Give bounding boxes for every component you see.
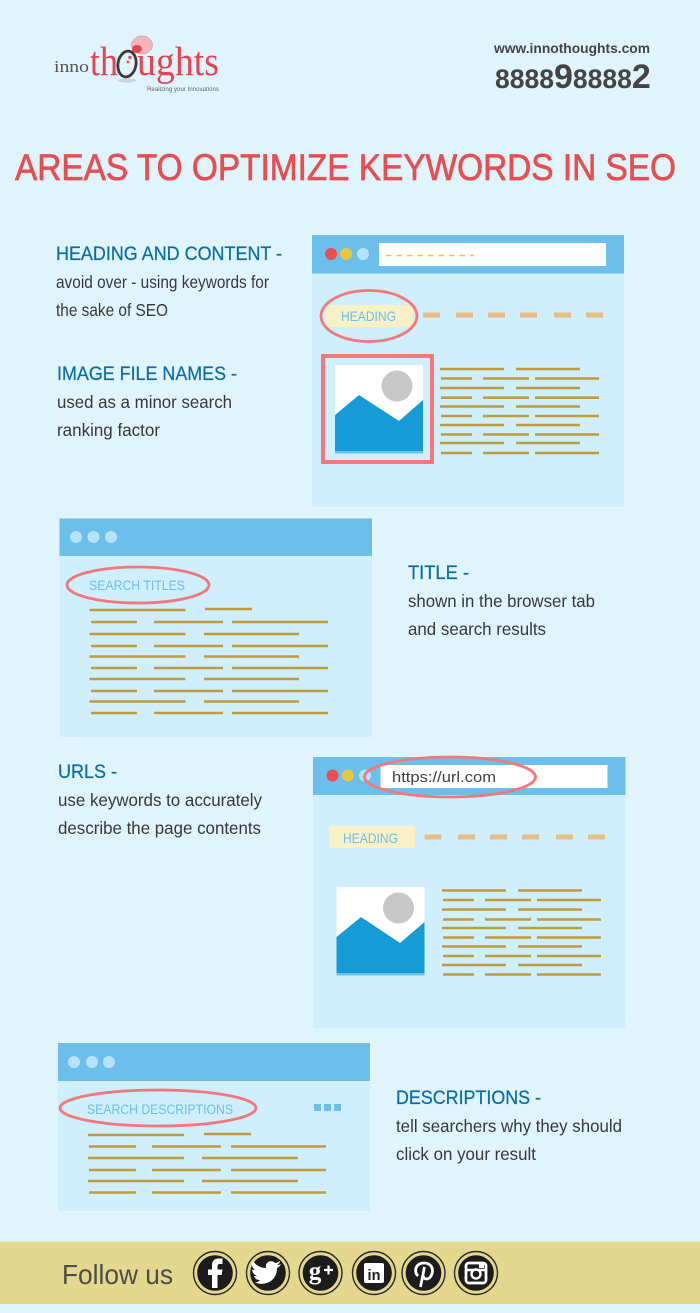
text block: heading and content: the sake of SEO — [56, 300, 168, 320]
panel: browser with search titles highlighted: SEARCH TITLES — [89, 577, 185, 593]
text block: heading and content: HEADING AND CONTENT - — [56, 243, 282, 265]
icon: pinterest — [402, 1252, 445, 1294]
text block: title: TITLE - — [408, 562, 469, 584]
footer bar — [0, 1242, 700, 1304]
icon: linkedin: in — [368, 1268, 380, 1284]
text block: heading and content — [56, 243, 282, 320]
contact details: www.innothoughts.com — [493, 40, 650, 56]
text block: urls: describe the page contents — [58, 818, 261, 838]
icon: twitter — [246, 1252, 290, 1294]
logo — [54, 36, 219, 93]
panel: browser with search descriptions highlighted — [58, 1043, 370, 1211]
text block: descriptions — [396, 1087, 622, 1164]
panel: browser with heading and image highlighted: HEADING — [341, 308, 396, 324]
contact details — [493, 40, 651, 96]
text block: heading and content: avoid over - using keywords for — [56, 272, 269, 292]
logo: inno — [54, 57, 89, 76]
text block: urls: use keywords to accurately — [58, 790, 262, 810]
text block: descriptions: tell searchers why they should — [396, 1116, 622, 1136]
text block: image file names — [57, 363, 237, 440]
panel: browser with url highlighted: https://url.com — [392, 769, 496, 786]
text block: urls — [58, 761, 262, 838]
text block: descriptions: DESCRIPTIONS - — [396, 1087, 541, 1109]
follow us label: Follow us — [62, 1259, 173, 1290]
text block: image file names: IMAGE FILE NAMES - — [57, 363, 237, 385]
icon: instagram — [454, 1252, 498, 1294]
text block: title: and search results — [408, 619, 546, 639]
text block: urls: URLS - — [58, 761, 117, 783]
text block: image file names: ranking factor — [57, 420, 160, 440]
panel: browser with url highlighted: HEADING — [343, 830, 398, 846]
logo: th — [90, 38, 118, 84]
icon: linkedin — [352, 1252, 396, 1294]
text block: descriptions: click on your result — [396, 1144, 536, 1164]
panel: browser with search titles highlighted — [60, 518, 372, 737]
icon: google plus: g — [309, 1258, 322, 1285]
icon: facebook — [194, 1252, 236, 1294]
panel: browser with heading and image highlighted — [312, 235, 624, 507]
panel: browser with url highlighted — [313, 757, 626, 1028]
logo: ughts — [137, 38, 219, 84]
icon: google plus — [299, 1252, 342, 1294]
text block: title: shown in the browser tab — [408, 591, 595, 611]
text block: title — [408, 562, 595, 639]
contact details: 8888988882 — [495, 58, 651, 96]
logo: Realizing your Innovations — [147, 87, 219, 93]
text block: image file names: used as a minor search — [57, 392, 232, 412]
panel: browser with search descriptions highlighted: SEARCH DESCRIPTIONS — [87, 1101, 233, 1117]
